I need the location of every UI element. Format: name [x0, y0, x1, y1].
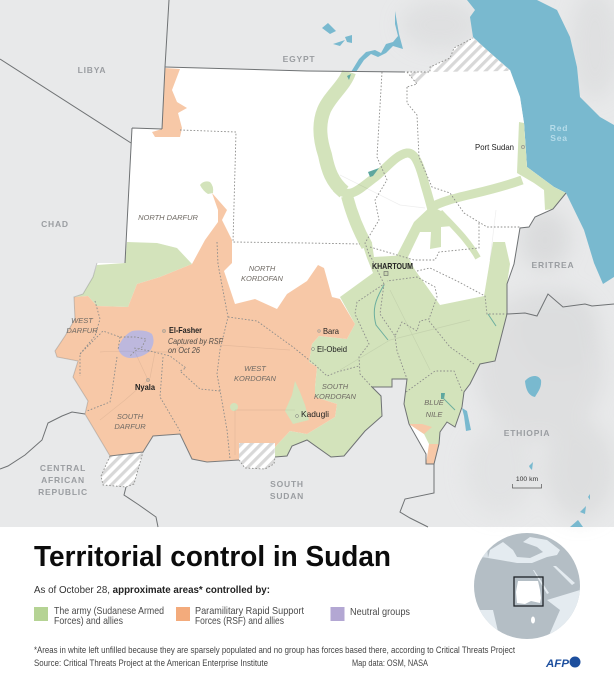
label: Egypt: EGYPT: [283, 54, 315, 64]
hatched disputed areas: [101, 38, 510, 487]
city: Bara: [318, 326, 339, 336]
region: South Darfur: DARFUR: [114, 422, 146, 431]
city: Bara: Bara: [323, 326, 339, 336]
terrain shading: [400, 0, 614, 520]
label: Chad: CHAD: [41, 219, 69, 229]
scale bar: 100 km: [516, 476, 538, 483]
legend: army: Forces) and allies: [54, 615, 123, 627]
legend: RSF: Forces (RSF) and allies: [195, 615, 284, 627]
label: Libya: LIBYA: [78, 65, 106, 75]
label: Central African Republic: CENTRAL: [40, 463, 86, 473]
water: [322, 11, 590, 527]
country borders: [0, 0, 614, 527]
region: West Kordofan: WEST: [244, 364, 267, 373]
AFP logo: [545, 656, 580, 670]
subtitle: As of October 28, approximate areas* controlled by:: [34, 584, 270, 596]
footnote: *Areas in white left unfilled because they are sparsely populated and no group has forces based there, according to Critical Threats Project: [34, 645, 515, 655]
label: Red Sea: Sea: [550, 133, 568, 143]
region: South Darfur: SOUTH: [117, 412, 144, 421]
region: West Darfur: DARFUR: [66, 326, 98, 335]
region: Blue Nile: BLUE: [424, 398, 445, 407]
source: Source: Critical Threats Project at the American Enterprise Institute: [34, 658, 268, 668]
region: South Kordofan: KORDOFAN: [314, 392, 357, 401]
army-controlled corridors: [320, 72, 522, 258]
city: Nyala: Nyala: [135, 382, 155, 392]
neutral groups area: [118, 330, 154, 358]
label: Eritrea: ERITREA: [532, 260, 574, 270]
RSF-controlled areas: [55, 68, 439, 464]
city: Kadugli: Kadugli: [301, 409, 329, 419]
label: South Sudan: SOUTH: [270, 479, 304, 489]
legend: RSF: [176, 605, 304, 627]
label: South Sudan: SUDAN: [270, 491, 304, 501]
panel: map: [0, 0, 614, 527]
locator: Sudan shape: [516, 581, 541, 604]
note: captured by RSF: Captured by RSF: [168, 337, 224, 346]
city: El-Obeid: El-Obeid: [317, 344, 347, 354]
city: Khartoum: [372, 261, 413, 276]
city: El-Fasher: El-Fasher: [169, 325, 203, 335]
admin boundaries: [80, 38, 520, 487]
army-controlled areas: [75, 122, 566, 457]
legend: RSF: Paramilitary Rapid Support: [195, 605, 304, 617]
region: West Kordofan: KORDOFAN: [234, 374, 277, 383]
Kadugli army pocket: [285, 381, 309, 424]
Sudan white land: [55, 67, 566, 464]
AFP logo: AFP: [545, 658, 570, 670]
locator box: [514, 577, 543, 606]
legend: army: The army (Sudanese Armed: [54, 605, 164, 617]
legend: neutral: Neutral groups: [350, 606, 410, 618]
region: North Darfur: NORTH DARFUR: [138, 213, 199, 222]
city: Khartoum: KHARTOUM: [372, 261, 413, 271]
city: Nyala: [135, 378, 155, 392]
legend: neutral: [330, 606, 410, 621]
roads: [100, 175, 496, 455]
label: Ethiopia: ETHIOPIA: [504, 428, 550, 438]
region: North Kordofan: NORTH: [249, 264, 276, 273]
label: Red Sea: Red: [550, 123, 568, 133]
region: Blue Nile: NILE: [426, 410, 443, 419]
map data credit: Map data: OSM, NASA: [352, 658, 428, 668]
city: Port Sudan: Port Sudan: [475, 142, 514, 152]
locator globe: [474, 533, 580, 639]
label: Central African Republic: AFRICAN: [41, 475, 85, 485]
region: North Kordofan: KORDOFAN: [241, 274, 284, 283]
scale bar: [512, 476, 542, 488]
title: Territorial control in Sudan: [34, 541, 391, 573]
legend: army: [34, 605, 164, 627]
region: South Kordofan: SOUTH: [322, 382, 349, 391]
label: Central African Republic: REPUBLIC: [38, 487, 88, 497]
note: captured by RSF: on Oct 26: [168, 346, 201, 355]
region: West Darfur: WEST: [71, 316, 94, 325]
Red Sea: [467, 0, 614, 284]
